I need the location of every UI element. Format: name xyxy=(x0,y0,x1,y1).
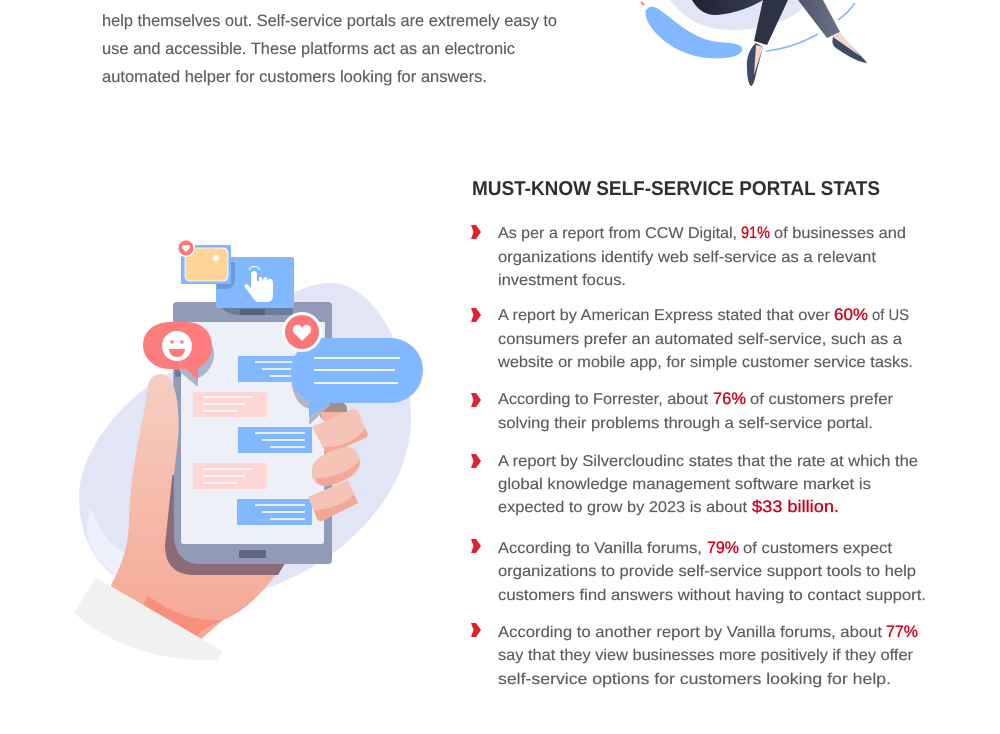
bullet chevron xyxy=(471,539,481,553)
stat item 3 xyxy=(471,389,893,432)
chat message blue 2 xyxy=(238,427,312,453)
stat item 1: 91% xyxy=(741,223,770,242)
phone screen xyxy=(181,322,325,544)
stat item 5: customers find answers without having to contact support. xyxy=(498,587,926,604)
stat item 2: website or mobile app, for simple customer service tasks. xyxy=(497,354,913,371)
chat message blue 3 xyxy=(237,499,312,525)
phone body xyxy=(173,302,332,564)
stat item 1: As per a report from CCW Digital, xyxy=(498,225,737,242)
icon: pointing hand xyxy=(245,266,273,302)
stat item 3: According to Forrester, about xyxy=(498,391,709,408)
chat message blue 1 xyxy=(238,356,312,382)
stat item 5: of customers expect xyxy=(743,540,893,557)
stat item 4: expected to grow by 2023 is about xyxy=(498,499,748,516)
stat item 4: global knowledge management software market is xyxy=(498,476,871,493)
stat item 5: organizations to provide self-service support tools to help xyxy=(498,563,916,580)
photo card with heart badge xyxy=(177,239,235,289)
fingers xyxy=(308,403,368,521)
intro text block: help themselves out. Self-service portals are extremely easy to xyxy=(102,12,557,30)
intro text block xyxy=(102,12,557,86)
stat item 3: 76% xyxy=(713,389,746,408)
stat item 5: 79% xyxy=(707,538,739,557)
heading: MUST-KNOW SELF-SERVICE PORTAL STATS xyxy=(472,178,880,200)
stat item 6: say that they view businesses more positively if they offer xyxy=(498,647,913,664)
stat item 4: $33 billion. xyxy=(752,497,839,516)
bullet chevron xyxy=(471,308,481,322)
hand palm and thumb xyxy=(110,374,283,640)
stat item 1: investment focus. xyxy=(498,272,626,289)
heart badge xyxy=(282,312,322,352)
thumb over phone edge xyxy=(135,374,179,475)
stat item 2: A report by American Express stated that over xyxy=(498,307,830,324)
chat message pink 1 xyxy=(193,392,267,417)
sleeve xyxy=(74,579,221,660)
stat item 3: solving their problems through a self-service portal. xyxy=(498,415,873,432)
stat item 2: consumers prefer an automated self-service, such as a xyxy=(498,331,902,348)
illustration: hand holding phone xyxy=(74,239,423,660)
bullet chevron xyxy=(471,393,481,407)
chat message pink 2 xyxy=(193,463,267,489)
stat item 6: According to another report by Vanilla forums, about xyxy=(498,624,883,641)
stat item 5 xyxy=(471,538,926,604)
intro text block: use and accessible. These platforms act as an electronic xyxy=(102,40,515,58)
stat item 6 xyxy=(471,622,918,688)
stat item 1 xyxy=(471,223,906,289)
stat item 2: 60% xyxy=(834,305,868,324)
bullet chevron xyxy=(471,454,481,468)
stat item 4: A report by Silvercloudinc states that the rate at which the xyxy=(498,453,918,470)
background blob xyxy=(79,283,411,594)
wrist shading xyxy=(143,596,223,637)
phone shadow xyxy=(165,450,290,575)
bullet chevron xyxy=(471,623,481,637)
stat item 6: self-service options for customers looking for help. xyxy=(498,671,891,688)
stat item 5: According to Vanilla forums, xyxy=(498,540,702,557)
stat item 4 xyxy=(471,453,918,516)
stat item 2 xyxy=(471,305,913,371)
illustration: walking figure legs xyxy=(641,0,867,86)
blob highlight xyxy=(87,507,130,578)
smile speech bubble xyxy=(143,322,214,387)
stat item 1: organizations identify web self-service as a relevant xyxy=(498,249,877,266)
intro text block: automated helper for customers looking for answers. xyxy=(102,68,487,86)
stat item 1: of businesses and xyxy=(774,225,906,242)
stat item 2: of US xyxy=(872,307,909,324)
stat item 6: 77% xyxy=(886,622,918,641)
bullet chevron xyxy=(471,225,481,239)
stat item 3: of customers prefer xyxy=(750,391,893,408)
large blue speech bubble xyxy=(291,338,423,425)
phone home button xyxy=(239,550,266,558)
tablet card with pointer xyxy=(216,257,294,315)
